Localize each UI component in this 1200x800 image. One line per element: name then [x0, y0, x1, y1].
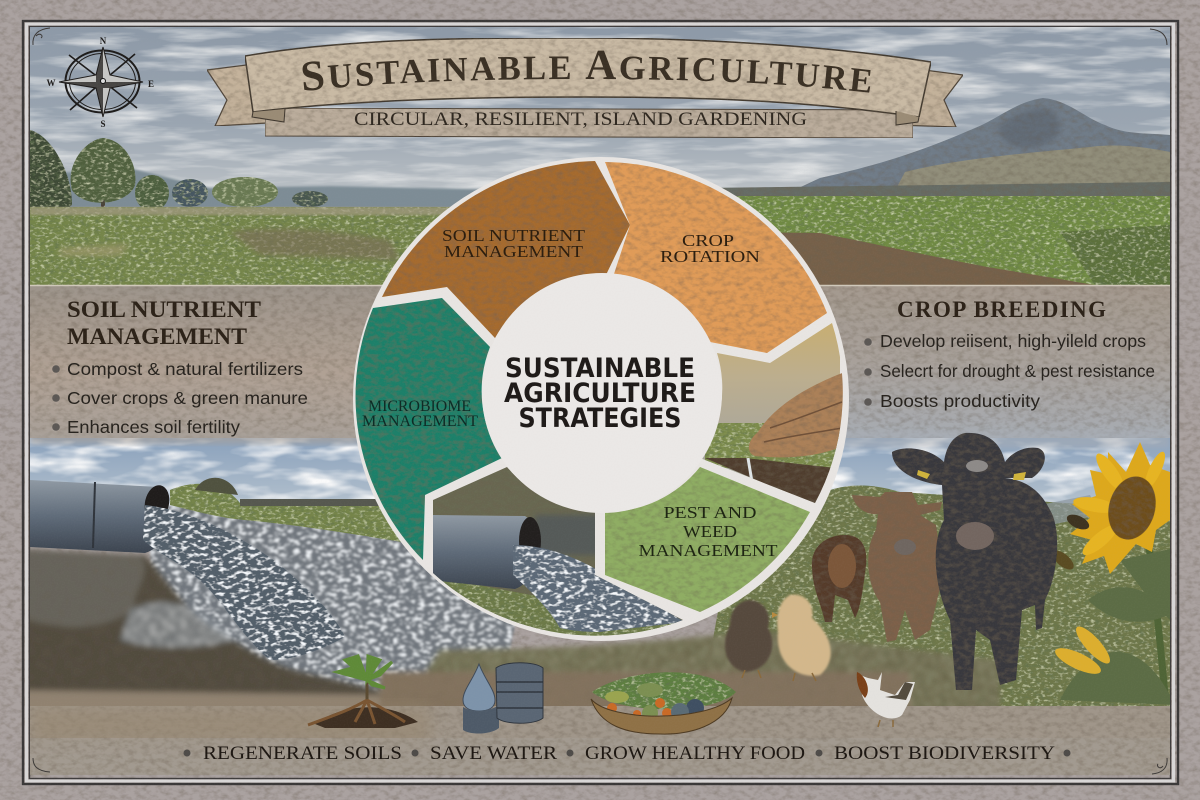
distant hills and left trees [30, 130, 1170, 207]
rooster [857, 672, 915, 727]
title text [302, 79, 872, 93]
mountain [801, 98, 1170, 187]
chicks [725, 595, 831, 681]
calf [812, 535, 866, 622]
grass bank [170, 484, 401, 542]
right pasture [700, 486, 1170, 712]
dark pond and rocks [30, 547, 384, 706]
segment: crop rotation [605, 162, 827, 353]
stem and leaves [1148, 540, 1165, 695]
right crop field [735, 196, 1170, 286]
compass letters: N [100, 36, 107, 46]
center hub [482, 273, 722, 513]
center hub: AGRICULTURE [504, 378, 696, 409]
sunflower and corn [1049, 442, 1175, 705]
tree cluster [30, 130, 328, 207]
subtitle text: CIRCULAR, RESILIENT, ISLAND GARDENING [354, 110, 807, 130]
pipe [433, 515, 528, 589]
segment: microbiome management [356, 298, 502, 560]
footer: benefits strip [184, 743, 1070, 764]
footer: benefits strip: REGENERATE SOILS [203, 743, 402, 764]
lower sky [30, 430, 1170, 510]
compass rose icon [46, 36, 154, 129]
pipe [30, 480, 167, 553]
right text band [810, 285, 1170, 445]
large pipe and waterfall [30, 480, 345, 660]
segment: pest and weed management: PEST AND [664, 503, 756, 522]
bullet list [864, 331, 1155, 411]
stream [513, 545, 685, 632]
bullet list: Enhances soil fertility [67, 417, 240, 437]
pipe opening [142, 483, 172, 523]
title banner: SUSTAINABLE AGRICULTURE [302, 50, 871, 93]
white disc [353, 157, 849, 641]
bullet list: Compost & natural fertilizers [67, 359, 303, 379]
barrel [496, 663, 543, 723]
footer: benefits strip: BOOST BIODIVERSITY [834, 743, 1055, 764]
petals [1070, 442, 1172, 574]
right ribbon tail [896, 70, 963, 127]
segment: pest and weed management [605, 467, 810, 612]
left field [30, 207, 470, 285]
upper sky [30, 27, 1170, 202]
compass letters: E [148, 79, 154, 89]
icon: vegetable basket [591, 672, 736, 734]
left text band [30, 285, 390, 445]
drop [463, 664, 495, 711]
footer: benefits strip: SAVE WATER [430, 743, 557, 764]
hand [749, 372, 845, 457]
basket rim [591, 698, 732, 734]
compass letters [46, 36, 154, 129]
segment: soil nutrient management: SOIL NUTRIENT [442, 226, 585, 245]
left ribbon tail [207, 64, 285, 126]
heading: CROP BREEDING [897, 297, 1106, 322]
photo: pipe pouring water [433, 467, 683, 636]
lower ground strip [30, 630, 1170, 775]
center hub: STRATEGIES [518, 403, 682, 434]
segment: soil nutrient management [382, 161, 630, 338]
circular strategy diagram [353, 157, 849, 650]
bullet list [52, 359, 308, 437]
river water [150, 505, 520, 700]
segment: microbiome management: MANAGEMENT [362, 413, 479, 430]
heading: SOIL NUTRIENT [67, 297, 261, 322]
footer: benefits strip: GROW HEALTHY FOOD [585, 743, 805, 764]
bullet list: Develop reiisent, high-yileld crops [880, 331, 1146, 351]
bullet list: Cover crops & green manure [67, 388, 308, 408]
segment: microbiome management: MICROBIOME [368, 398, 471, 415]
panel: soil nutrient management: MANAGEMENT [67, 324, 247, 349]
river and bank [30, 478, 516, 706]
center hub: SUSTAINABLE [505, 353, 695, 384]
icon: water drop and barrels [463, 663, 543, 734]
right soil rows [781, 225, 1170, 285]
main ribbon [245, 38, 931, 117]
segment: pest and weed management: MANAGEMENT [638, 541, 778, 560]
compass letters: W [46, 78, 56, 88]
compass letters: S [100, 119, 106, 129]
panel: crop breeding [864, 297, 1155, 411]
icon: seedling with roots [308, 656, 418, 728]
segment: pest and weed management: WEED [683, 522, 737, 541]
corn cobs [1055, 648, 1101, 674]
title banner [207, 38, 963, 138]
segment: soil nutrient management: MANAGEMENT [444, 242, 583, 261]
bullet list: Boosts productivity [880, 391, 1040, 411]
segment: crop rotation: ROTATION [660, 247, 760, 266]
photo: hand and soil [702, 323, 843, 503]
bullet list: Selecrt for drought & pest resistance [880, 361, 1155, 381]
lower subtitle plate [265, 108, 913, 138]
segment: crop rotation: CROP [682, 231, 734, 250]
water stream [143, 505, 345, 660]
small container [463, 705, 499, 734]
black cow [892, 433, 1057, 690]
panel: soil nutrient management [52, 297, 308, 437]
cows [812, 433, 1057, 690]
bees [1066, 514, 1090, 530]
brown cow [852, 492, 943, 642]
